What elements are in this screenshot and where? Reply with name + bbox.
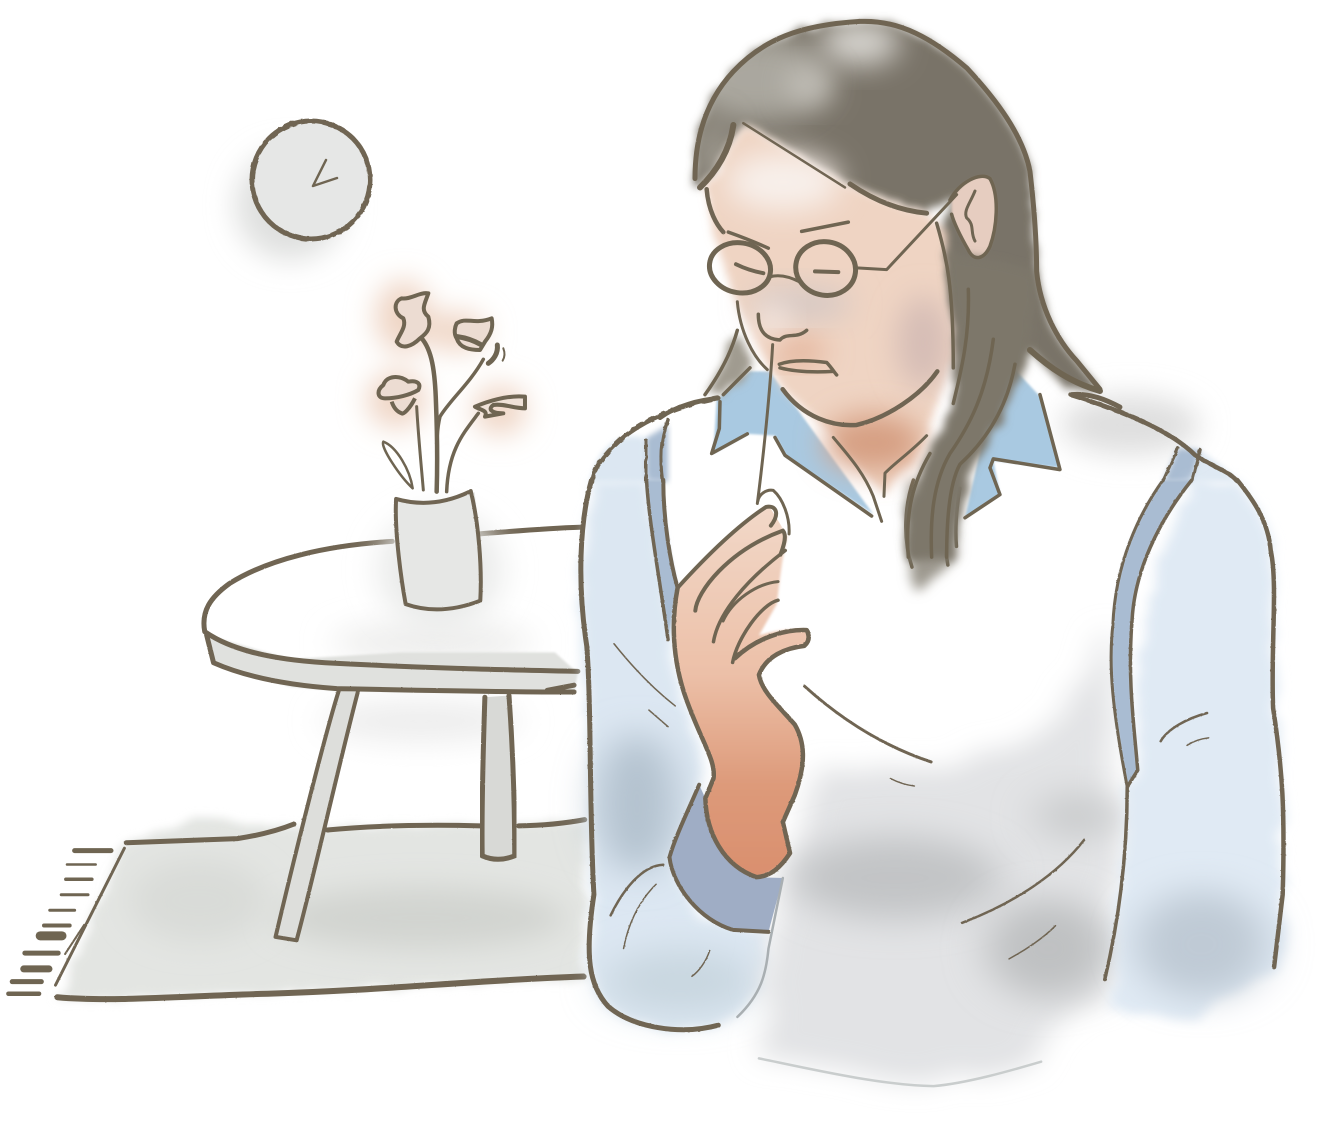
- vase: [379, 491, 501, 628]
- table top wash: [207, 621, 578, 742]
- shoulder lines: [592, 395, 1237, 482]
- eyebrows, glasses and eyes: [706, 195, 957, 300]
- face skin: [707, 123, 996, 493]
- hair highlights: [687, 21, 900, 182]
- hair ends: [906, 480, 967, 594]
- vest strap stripes: [647, 480, 1192, 787]
- table and rug: [8, 491, 586, 1001]
- flower stems: [383, 337, 505, 492]
- table outline: [204, 527, 580, 692]
- head: [660, 21, 1120, 560]
- rug fringe: [8, 851, 111, 994]
- vest hem and faded sleeve edge: [737, 878, 1041, 1086]
- hair and head outline: [695, 21, 1120, 425]
- table legs: [276, 691, 515, 940]
- hand: [674, 490, 809, 877]
- nasal swab: [757, 345, 773, 504]
- ear: [950, 176, 996, 258]
- person shoulders wash: [591, 395, 1237, 482]
- vest lower wash: [761, 625, 1127, 1085]
- neck and collar lines: [660, 395, 1060, 521]
- long hair strand wash: [907, 250, 1037, 560]
- nose and mouth: [758, 314, 837, 375]
- torso, arms and hand: [580, 480, 1287, 1086]
- flower washes: [367, 280, 527, 435]
- shirt cuff: [669, 785, 783, 932]
- left sleeve wash: [580, 480, 768, 1030]
- torso lines: [581, 480, 1284, 1030]
- shirt collar wash: [713, 368, 1060, 518]
- rug outline: [55, 820, 585, 999]
- hair strands: [705, 223, 1100, 557]
- rug wash: [57, 818, 586, 1001]
- wall clock: [235, 121, 370, 260]
- flower petals: [379, 293, 525, 417]
- hair wash: [693, 21, 1100, 395]
- flowers: [367, 280, 527, 492]
- right sleeve wash: [1110, 480, 1287, 1019]
